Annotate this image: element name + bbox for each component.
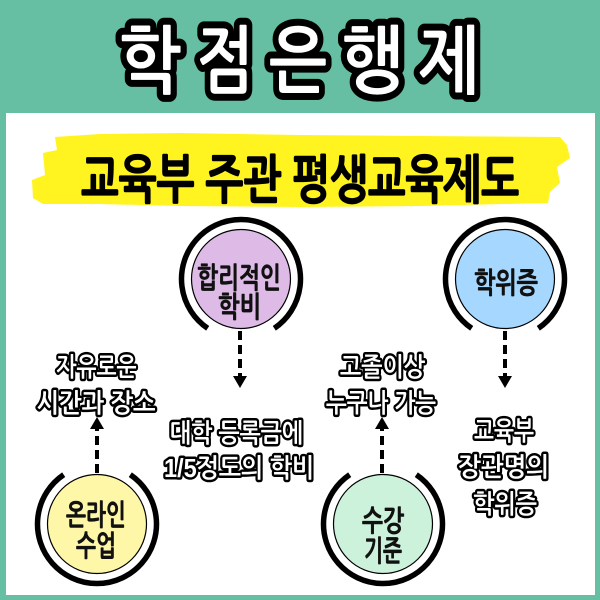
label: 대학 등록금에 1/5정도의 학비	[164, 418, 314, 483]
arrow: down from 합리적인 학비	[233, 331, 247, 388]
panel: white content area	[6, 113, 595, 595]
label: 고졸이상 누구나 가능	[326, 352, 436, 418]
circle: 수강 기준: 수강	[362, 506, 405, 538]
label: 자유로운 시간과 장소	[36, 352, 156, 418]
circle: 합리적인 학비	[181, 219, 301, 328]
circle: 학위증: 학위증	[474, 268, 538, 300]
title: 은	[269, 20, 327, 103]
label: 자유로운 시간과 장소: 자유로운	[56, 352, 136, 382]
label: 고졸이상 누구나 가능: 고졸이상	[340, 352, 425, 382]
title	[119, 20, 479, 103]
circle: 온라인 수업: 수업	[76, 531, 116, 563]
label: 교육부 장관명의 학위증	[458, 416, 549, 519]
label: 고졸이상 누구나 가능: 누구나 가능	[326, 388, 436, 418]
circle: 온라인 수업: 온라인	[66, 500, 126, 532]
arrow: down from 학위증	[498, 331, 512, 388]
title: 학	[119, 20, 181, 103]
label: 교육부 장관명의 학위증: 장관명의	[458, 452, 549, 482]
label: 대학 등록금에 1/5정도의 학비: 대학 등록금에	[170, 418, 303, 448]
title: 제	[419, 20, 479, 103]
title: 점	[196, 20, 254, 103]
arrow: up from 온라인 수업	[90, 417, 104, 473]
circle: 합리적인 학비: 합리적인	[197, 263, 281, 295]
circle: 온라인 수업	[37, 474, 156, 584]
circle: 수강 기준	[323, 474, 442, 584]
circle: 학위증	[445, 219, 565, 328]
arrow: up from 수강 기준	[375, 417, 389, 473]
label: 교육부 장관명의 학위증: 학위증	[473, 489, 537, 519]
circle: 수강 기준: 기준	[364, 536, 402, 568]
label: 대학 등록금에 1/5정도의 학비: 1/5정도의 학비	[164, 453, 314, 483]
label: 자유로운 시간과 장소: 시간과 장소	[36, 388, 156, 418]
title: 행	[341, 20, 403, 103]
label: 교육부 장관명의 학위증: 교육부	[474, 416, 534, 446]
circle: 합리적인 학비: 학비	[218, 292, 261, 324]
brush highlight banner	[32, 133, 570, 207]
